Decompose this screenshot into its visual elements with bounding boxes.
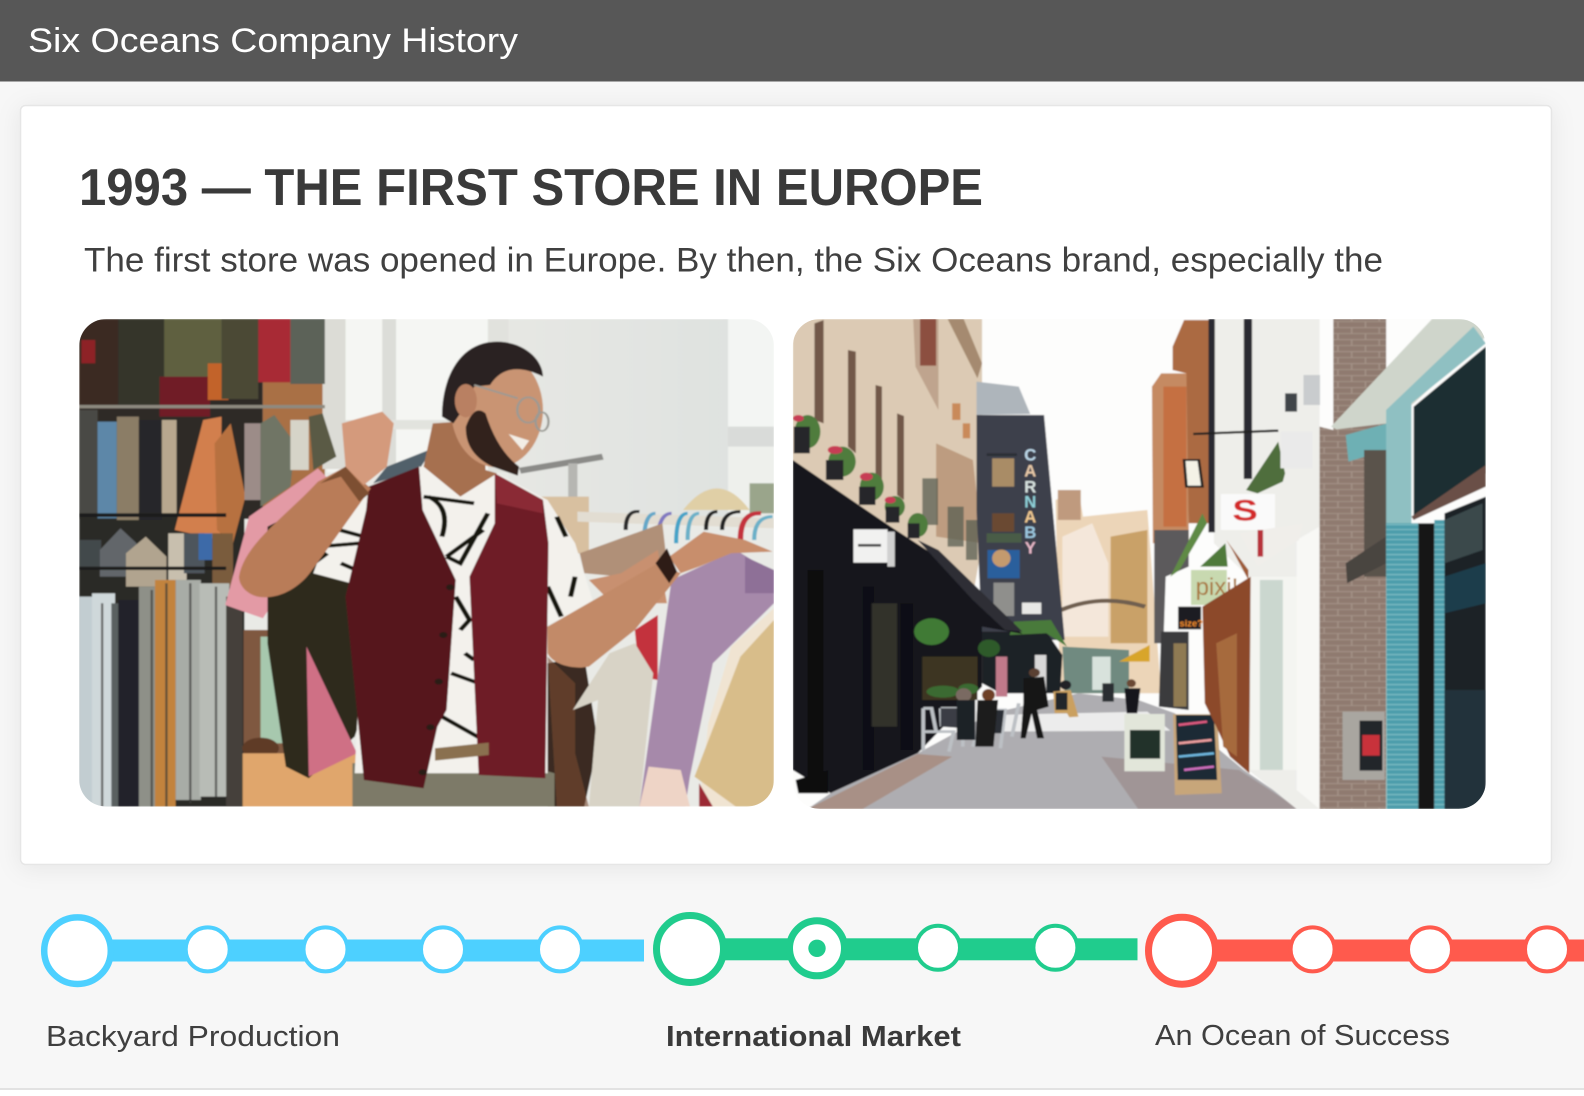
chairs and diners — [923, 703, 1019, 752]
photo: European shopping street: pixi! — [1196, 574, 1238, 601]
photo: man shopping for clothes — [79, 319, 774, 807]
timeline section: International Market (active) — [656, 916, 1138, 1053]
white shop section — [1214, 319, 1320, 809]
CARNABY sign: N — [1024, 492, 1036, 511]
header bar — [0, 0, 1584, 82]
left brick building — [793, 319, 982, 597]
dark CARNABY building — [977, 382, 1030, 415]
heading: 1993 — THE FIRST STORE IN EUROPE — [79, 159, 983, 217]
right orange brick buildings — [1152, 373, 1189, 543]
left black shopfront — [793, 460, 1022, 793]
timeline section: International Market (active): International Market — [666, 1021, 961, 1053]
man: arms — [239, 467, 371, 597]
CARNABY sign: Y — [1025, 538, 1036, 557]
CARNABY sign: R — [1024, 477, 1036, 496]
man: vest — [346, 467, 456, 788]
window boxes with flowers — [795, 415, 928, 537]
CCTV — [1303, 375, 1320, 405]
photo: European shopping street: size? — [1180, 619, 1203, 629]
CARNABY sign: B — [1024, 523, 1036, 542]
timeline section: An Ocean of Success — [1148, 917, 1584, 1052]
photo: European shopping street — [793, 319, 1486, 809]
man: head — [424, 420, 497, 497]
body text: The first store was opened in Europe. By then, the Six Oceans brand, especially the — [84, 242, 1383, 280]
CARNABY sign: C — [1024, 446, 1036, 465]
header title: Six Oceans Company History — [28, 22, 518, 60]
timeline section: Backyard Production — [44, 917, 644, 1053]
brick wall — [1320, 319, 1386, 809]
timeline section: Backyard Production: Backyard Production — [46, 1021, 340, 1053]
panel: story card — [20, 106, 1552, 864]
teal tile and dark glass — [1331, 319, 1486, 429]
photo: European shopping street: S — [1232, 495, 1258, 528]
MAC shopfront — [982, 632, 1062, 693]
CARNABY sign — [1024, 446, 1036, 557]
timeline — [44, 916, 1584, 1053]
A-frame boards — [1053, 690, 1078, 717]
man: belt — [435, 743, 489, 761]
man: trousers — [352, 762, 556, 807]
CARNABY sign: A — [1024, 461, 1036, 480]
street — [808, 693, 1301, 809]
right side garments — [548, 657, 598, 807]
timeline section: An Ocean of Success: An Ocean of Success — [1155, 1020, 1450, 1052]
walking man — [1021, 668, 1049, 738]
CARNABY sign: A — [1024, 507, 1036, 526]
rail and stand — [520, 457, 603, 471]
distant buildings — [1056, 490, 1161, 693]
garments over the shoulder — [224, 468, 327, 619]
man: shirt — [313, 467, 593, 773]
